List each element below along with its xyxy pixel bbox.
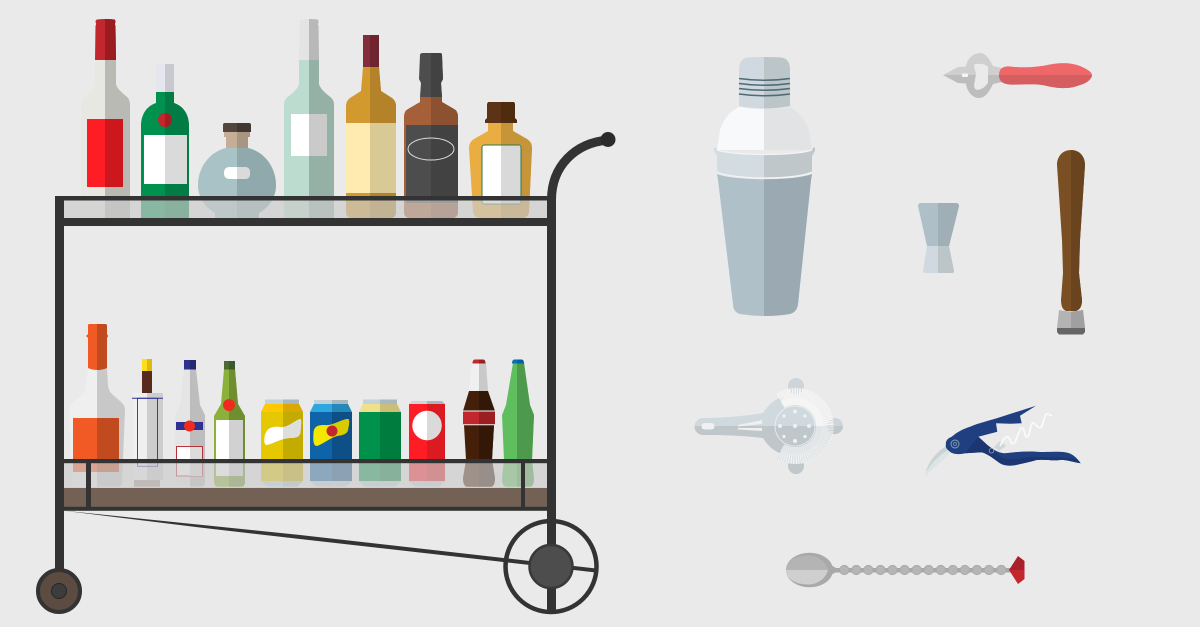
bottle: clear with blue band (175, 360, 205, 487)
diagonal strut (62, 510, 596, 572)
bottle: olive beer (214, 361, 245, 487)
bottle: pale green (284, 19, 334, 222)
left post (55, 196, 64, 576)
bottom rail (55, 507, 552, 511)
bottle: round blue decanter (198, 123, 276, 222)
handle knob (600, 132, 616, 147)
glass shelf: upper (64, 200, 547, 218)
can: red (409, 401, 445, 487)
wooden tray (64, 487, 547, 507)
muddler (1057, 150, 1085, 334)
can: yellow (261, 400, 303, 487)
bottle: squat orange (469, 102, 532, 218)
bottle opener (943, 53, 1092, 98)
can: blue (310, 400, 352, 487)
bottle: cola (463, 360, 495, 487)
bar cart frame (38, 132, 616, 612)
bottle: white with red label (87, 19, 130, 218)
group: bottom shelf bottles and cans (69, 324, 534, 487)
bottle: amber whisky (346, 35, 396, 218)
lower shelf rail (64, 459, 547, 463)
waiter corkscrew (925, 406, 1081, 477)
bottle: dark label whiskey (404, 53, 458, 218)
can: green (359, 400, 401, 487)
hawthorne strainer (694, 378, 843, 474)
group: top shelf bottles (81, 19, 532, 222)
right wheel hub (530, 545, 572, 588)
strainer spring (779, 393, 829, 459)
right wheel rim (506, 521, 596, 612)
jigger (918, 203, 959, 273)
glass shelf: lower (64, 463, 547, 487)
upper shelf rail (55, 218, 552, 226)
right post (547, 196, 556, 612)
top rail (55, 196, 552, 200)
handle (552, 140, 608, 200)
bottle: slim clear with navy outline (132, 359, 163, 487)
short post right (521, 463, 525, 507)
short post left (86, 463, 91, 507)
left wheel (38, 570, 80, 612)
bottle: orange cap liquor (69, 324, 125, 487)
bottle: green gin (141, 64, 189, 222)
bar spoon (786, 553, 1024, 587)
bottle: green soda (502, 360, 534, 487)
cocktail shaker (714, 57, 815, 316)
